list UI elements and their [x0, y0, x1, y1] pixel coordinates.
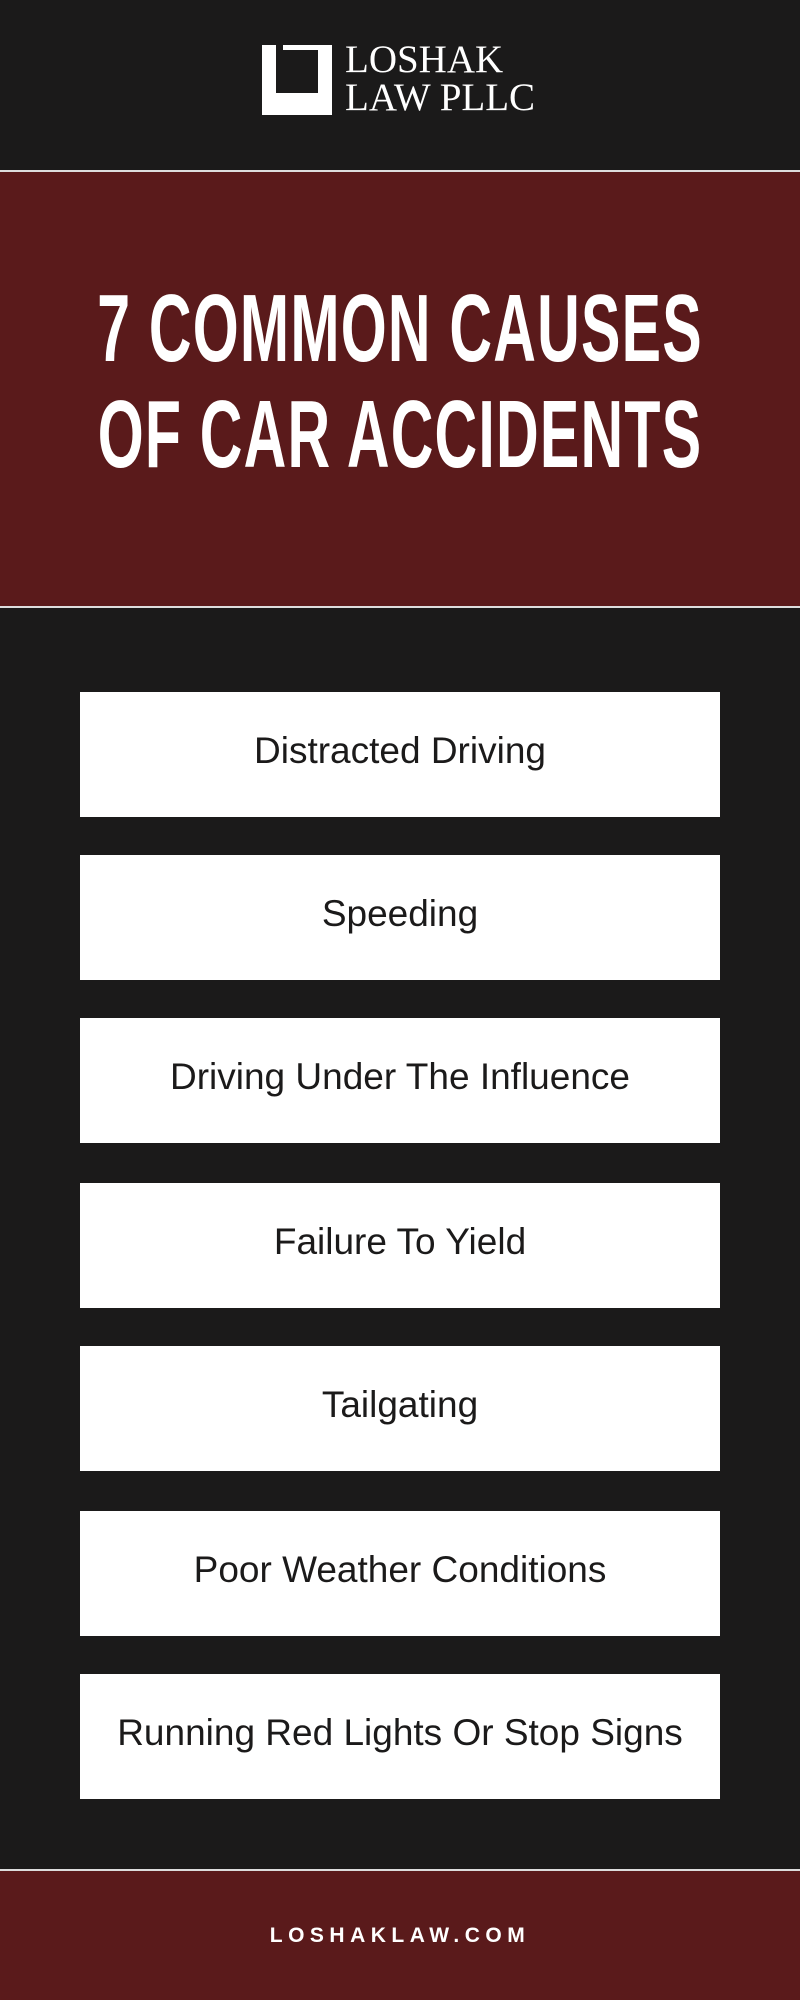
- item 2: Speeding: [322, 892, 478, 934]
- item 3: Driving Under The Influence: [170, 1056, 630, 1096]
- logo text: LAW PLLC: [345, 76, 535, 119]
- title: OF CAR ACCIDENTS: [98, 381, 702, 488]
- item 3: [80, 1018, 720, 1143]
- icon: logo mark: [262, 45, 332, 115]
- header logo: [262, 38, 535, 119]
- footer: [0, 1871, 800, 2000]
- item 5: [80, 1346, 720, 1471]
- logo text: LOSHAK: [345, 38, 503, 81]
- logo text: [345, 38, 535, 119]
- item 7: [80, 1674, 720, 1799]
- item 4: Failure To Yield: [274, 1220, 526, 1262]
- item 6: Poor Weather Conditions: [194, 1548, 606, 1590]
- item 6: [80, 1511, 720, 1636]
- item 4: [80, 1183, 720, 1308]
- item 7: Running Red Lights Or Stop Signs: [117, 1712, 683, 1752]
- title: [97, 275, 703, 488]
- item 2: [80, 855, 720, 980]
- title: 7 COMMON CAUSES: [97, 275, 703, 382]
- item 5: Tailgating: [322, 1384, 478, 1424]
- panel: title band: [0, 172, 800, 606]
- item 1: Distracted Driving: [254, 730, 546, 770]
- footer url: LOSHAKLAW.COM: [270, 1924, 530, 1947]
- item 1: [80, 692, 720, 817]
